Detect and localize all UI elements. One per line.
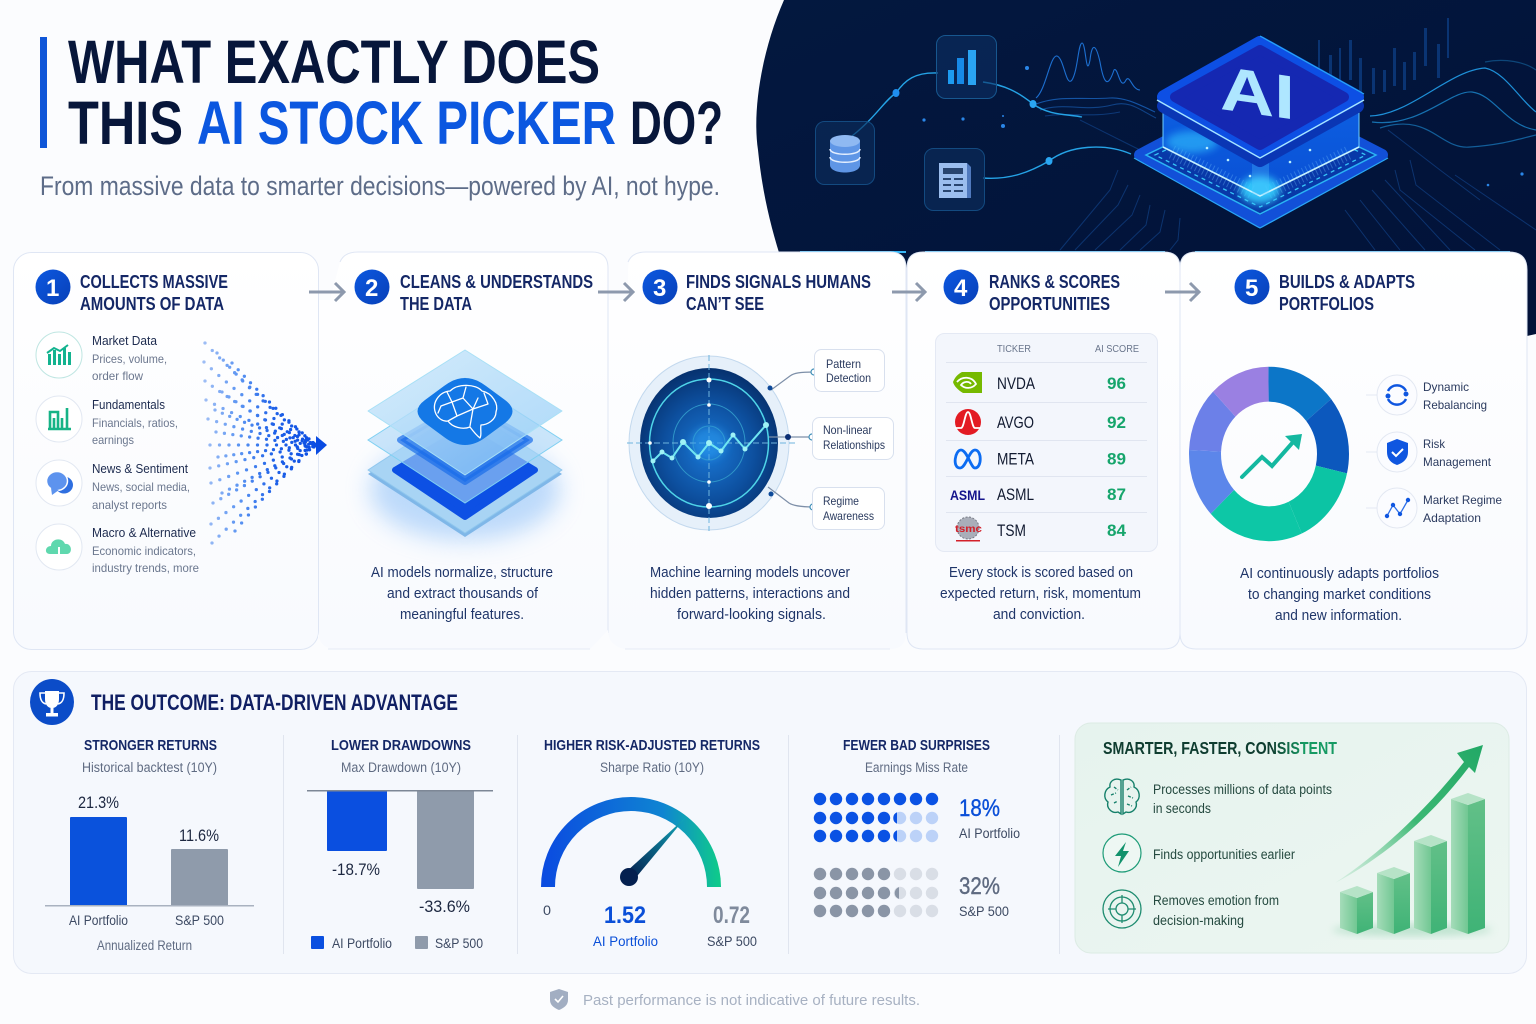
step 1 data sources: Economic indicators, xyxy=(92,544,196,558)
legend: S&P 500 xyxy=(435,936,483,951)
wave lines left xyxy=(1036,43,1156,118)
row: META: 89 xyxy=(1107,450,1126,468)
bar chart: annualized return: AI Portfolio xyxy=(69,913,128,928)
metric: higher risk-adjusted returns: 0 xyxy=(543,903,551,918)
step 1 data sources: Fundamentals xyxy=(92,398,165,412)
callout: regime awareness xyxy=(812,488,884,530)
ranking table xyxy=(936,334,1158,552)
metric: higher risk-adjusted returns: 0.72 xyxy=(713,902,750,929)
step 2 header: CLEANS & UNDERSTANDS xyxy=(400,271,593,292)
step 1 data sources: Financials, ratios, xyxy=(92,416,178,430)
row: AVGO: AVGO xyxy=(997,414,1034,432)
bar chart: max drawdown: -33.6% xyxy=(419,898,470,916)
subtitle: From massive data to smarter decisions—powered by AI, not hype. xyxy=(40,171,720,201)
row: ASML: ASML xyxy=(997,486,1034,504)
title xyxy=(68,28,723,157)
step 1 data sources: News, social media, xyxy=(92,480,190,494)
panel: smarter, faster, consistent: Processes millions of data points xyxy=(1153,782,1332,797)
metric: fewer bad surprises: FEWER BAD SURPRISES xyxy=(843,737,990,754)
callout: regime awareness: Regime xyxy=(823,494,859,508)
step 1 data sources xyxy=(36,332,199,575)
bar chart: annualized return xyxy=(45,794,254,928)
step 3 header: CAN’T SEE xyxy=(686,293,764,314)
step 1 data sources: News & Sentiment xyxy=(92,462,188,476)
step 2 description: and extract thousands of xyxy=(387,586,539,602)
radar signal chart xyxy=(627,355,795,531)
row: NVDA xyxy=(953,372,1126,393)
callout: regime awareness: Awareness xyxy=(823,509,874,523)
layered data stack xyxy=(368,350,562,540)
row: TSM: TSM xyxy=(997,522,1026,540)
row: ASML xyxy=(950,485,1126,504)
AI chip: AI xyxy=(1220,54,1295,133)
bar chart: max drawdown: -18.7% xyxy=(332,861,380,879)
bar chart: annualized return: 11.6% xyxy=(179,827,219,845)
step 5 description: to changing market conditions xyxy=(1248,587,1431,603)
step 1 header xyxy=(36,270,228,314)
step 5 description: AI continuously adapts portfolios xyxy=(1240,566,1439,582)
icon: target xyxy=(1103,890,1141,928)
row: META: META xyxy=(997,450,1034,468)
metric: stronger returns: STRONGER RETURNS xyxy=(84,737,217,754)
metric: stronger returns xyxy=(45,737,254,953)
legend: AI Portfolio xyxy=(332,936,392,951)
row: META xyxy=(955,450,1126,468)
icon: risk shield xyxy=(1377,432,1417,472)
metric: higher risk-adjusted returns: HIGHER RISK-ADJUSTED RETURNS xyxy=(544,737,760,754)
connector curves with nodes xyxy=(852,73,1131,178)
step 1 data sources: Market Data xyxy=(92,334,157,348)
metric: higher risk-adjusted returns: AI Portfolio xyxy=(593,934,658,949)
header illustration: dark AI scene xyxy=(756,0,1536,336)
circuit traces xyxy=(1060,120,1536,250)
step 5 description xyxy=(1240,566,1439,624)
arrow 4 to 5 xyxy=(1165,283,1199,301)
step 3 header: 3 xyxy=(653,275,666,302)
growth arrow xyxy=(1335,745,1483,883)
metric: fewer bad surprises xyxy=(814,737,1020,919)
metric: fewer bad surprises: Earnings Miss Rate xyxy=(865,760,968,775)
step 3 description: Machine learning models uncover xyxy=(650,565,850,581)
icon: fundamentals xyxy=(36,396,82,442)
portfolio features: Management xyxy=(1423,455,1492,469)
legend xyxy=(311,936,483,951)
step 4 header xyxy=(944,270,1120,314)
icon: dynamic rebalancing xyxy=(1366,375,1417,508)
step 2 description xyxy=(371,565,553,623)
data funnel dots xyxy=(204,343,316,543)
callout: pattern detection xyxy=(814,350,884,392)
step 1 data sources: order flow xyxy=(92,369,143,383)
callout: pattern detection: Detection xyxy=(826,371,871,385)
metric: stronger returns: Historical backtest (10Y) xyxy=(82,760,217,775)
ranking table: TICKER xyxy=(997,343,1031,355)
growth bars xyxy=(1340,793,1485,934)
metric: fewer bad surprises: AI Portfolio xyxy=(959,826,1020,841)
panel: smarter, faster, consistent: in seconds xyxy=(1153,801,1211,816)
portfolio donut chart xyxy=(1205,384,1333,524)
row: NVDA: 96 xyxy=(1107,374,1126,393)
title: DO? xyxy=(630,89,723,157)
wave lines right xyxy=(1370,60,1536,147)
row: AVGO: 92 xyxy=(1107,413,1126,432)
callout: non-linear relationships: Relationships xyxy=(823,438,885,452)
icon: database tile xyxy=(816,122,874,184)
portfolio features: Dynamic xyxy=(1423,380,1469,394)
row: NVDA: NVDA xyxy=(997,375,1035,393)
icon: bar chart tile xyxy=(936,36,996,98)
outcome heading: THE OUTCOME: DATA-DRIVEN ADVANTAGE xyxy=(91,690,458,715)
icon: trophy xyxy=(30,679,74,725)
panel: smarter, faster, consistent: decision-making xyxy=(1153,913,1244,928)
step 2 description: AI models normalize, structure xyxy=(371,565,553,581)
title: WHAT EXACTLY DOES xyxy=(68,28,600,96)
metric: stronger returns: Annualized Return xyxy=(97,938,192,953)
sparkle dots xyxy=(922,66,1524,186)
panel: step cards xyxy=(14,252,1527,650)
metric: lower drawdowns: LOWER DRAWDOWNS xyxy=(331,737,471,754)
step 2 header xyxy=(354,270,593,314)
step 5 header: 5 xyxy=(1245,275,1258,302)
portfolio features: Market Regime xyxy=(1423,493,1502,507)
step 1 header: 1 xyxy=(46,275,59,302)
gauge xyxy=(548,804,714,887)
portfolio features xyxy=(1366,375,1502,528)
metric: higher risk-adjusted returns: Sharpe Ratio (10Y) xyxy=(600,760,704,775)
panel: smarter, faster, consistent: Removes emotion from xyxy=(1153,893,1279,908)
bar chart: max drawdown xyxy=(307,790,493,916)
title: AI STOCK PICKER xyxy=(197,89,616,157)
step 4 description xyxy=(940,565,1141,623)
icon: lightning bolt xyxy=(1103,834,1141,872)
step 4 header: 4 xyxy=(954,275,968,302)
portfolio features: Risk xyxy=(1423,437,1446,451)
row: TSM xyxy=(955,517,1127,542)
metric: fewer bad surprises: 18% xyxy=(959,795,1000,822)
icon: brain xyxy=(1105,779,1139,814)
metric: fewer bad surprises: S&P 500 xyxy=(959,904,1009,919)
disclaimer: Past performance is not indicative of future results. xyxy=(583,992,920,1009)
step 2 description: meaningful features. xyxy=(400,607,524,623)
icon: growth arrow xyxy=(1242,434,1302,477)
title: THIS xyxy=(68,89,183,157)
portfolio features: Rebalancing xyxy=(1423,398,1487,412)
title accent bar xyxy=(40,37,47,148)
ranking table: AI SCORE xyxy=(1095,343,1139,355)
row: TSM: tsmc xyxy=(955,524,982,535)
dot matrix: AI portfolio xyxy=(814,793,938,842)
step 4 description: Every stock is scored based on xyxy=(949,565,1133,581)
row: AVGO xyxy=(955,409,1126,435)
step 3 description xyxy=(650,565,850,623)
metric: fewer bad surprises: 32% xyxy=(959,873,1000,900)
step 1 data sources: Macro & Alternative xyxy=(92,526,196,540)
arrow 1 to 2 xyxy=(309,283,344,301)
candlestick bars xyxy=(1318,18,1449,96)
step 5 header: BUILDS & ADAPTS xyxy=(1279,271,1415,292)
icon: document tile xyxy=(924,148,984,210)
row: TSM: 84 xyxy=(1107,521,1127,540)
dot matrix: S&P 500 xyxy=(814,868,938,917)
step 1 data sources: analyst reports xyxy=(92,498,167,512)
metric: higher risk-adjusted returns: S&P 500 xyxy=(707,934,757,949)
step 2 header: THE DATA xyxy=(400,293,472,314)
portfolio features: Adaptation xyxy=(1423,511,1481,525)
metric: higher risk-adjusted returns xyxy=(543,737,760,949)
metric: lower drawdowns xyxy=(307,737,493,951)
step 1 data sources: industry trends, more xyxy=(92,561,199,575)
icon: brain xyxy=(434,385,497,438)
metric: higher risk-adjusted returns: 1.52 xyxy=(604,902,646,929)
bar chart: annualized return: S&P 500 xyxy=(175,913,224,928)
step 5 header xyxy=(1234,270,1415,314)
arrow 2 to 3 xyxy=(598,283,633,301)
step 5 header: PORTFOLIOS xyxy=(1279,293,1374,314)
AI chip xyxy=(1134,36,1388,228)
brain tile xyxy=(418,378,512,445)
step 1 data sources: earnings xyxy=(92,433,134,447)
step 4 description: expected return, risk, momentum xyxy=(940,586,1141,602)
panel: smarter, faster, consistent: SMARTER, FASTER, CONSISTENT xyxy=(1103,738,1337,758)
funnel arrow tip xyxy=(316,436,327,455)
panel: smarter, faster, consistent: Finds opportunities earlier xyxy=(1153,847,1295,862)
step 3 description: forward-looking signals. xyxy=(677,607,826,623)
row: ASML: ASML xyxy=(950,487,985,503)
bar chart: annualized return: 21.3% xyxy=(78,794,119,812)
step 1 header: COLLECTS MASSIVE xyxy=(80,271,228,292)
panel: outcome xyxy=(14,672,1526,974)
step 1 data sources: Prices, volume, xyxy=(92,352,167,366)
icon: regime adaptation xyxy=(1377,488,1417,528)
step 3 header xyxy=(642,270,871,314)
step 4 header: OPPORTUNITIES xyxy=(989,293,1110,314)
icon: news and sentiment xyxy=(36,460,82,506)
row: ASML: 87 xyxy=(1107,485,1126,504)
metric: lower drawdowns: Max Drawdown (10Y) xyxy=(341,760,461,775)
callout: non-linear relationships xyxy=(812,418,894,460)
step 3 header: FINDS SIGNALS HUMANS xyxy=(686,271,871,292)
step 5 description: and new information. xyxy=(1275,608,1402,624)
callout connectors xyxy=(768,369,817,510)
panel: smarter, faster, consistent xyxy=(1075,723,1509,953)
icon: macro cloud xyxy=(36,524,82,570)
step 1 header: AMOUNTS OF DATA xyxy=(80,293,224,314)
step 4 description: and conviction. xyxy=(993,607,1085,623)
icon: market data xyxy=(36,332,82,378)
arrow 3 to 4 xyxy=(892,283,925,301)
step 2 header: 2 xyxy=(365,275,378,302)
step 3 description: hidden patterns, interactions and xyxy=(650,586,850,602)
step 4 header: RANKS & SCORES xyxy=(989,271,1120,292)
callout: non-linear relationships: Non-linear xyxy=(823,423,872,437)
callout: pattern detection: Pattern xyxy=(826,357,861,371)
